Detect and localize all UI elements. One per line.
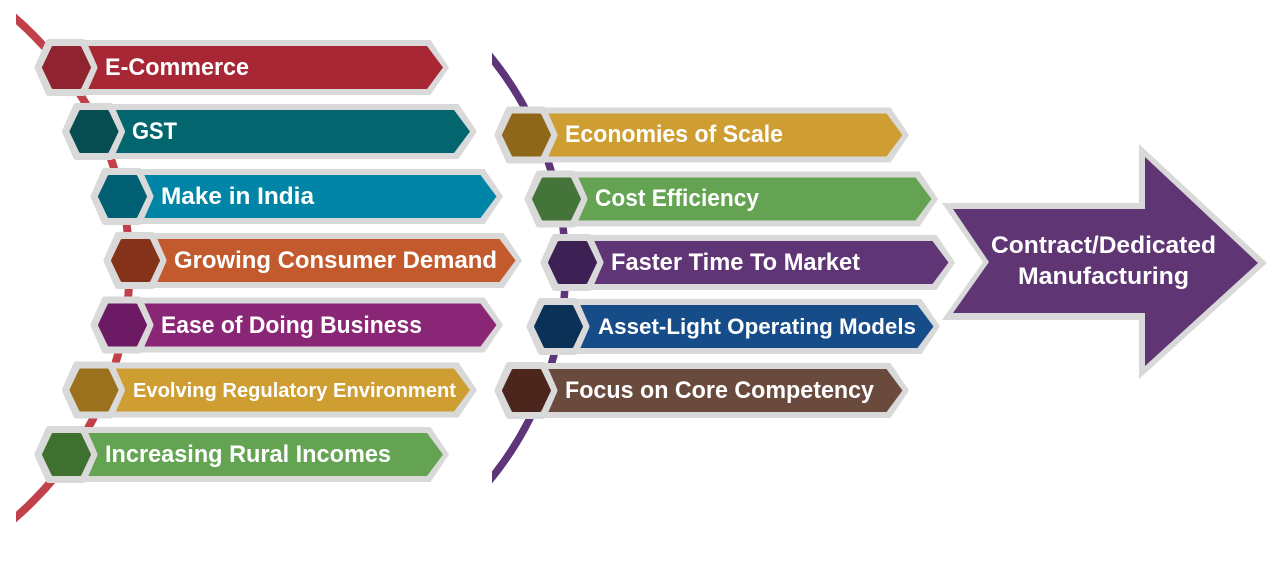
icon: hexagon: [38, 42, 94, 92]
arrow label line 1: Contract/Dedicated: [991, 232, 1216, 259]
label: Focus on Core Competency: [565, 377, 875, 404]
driver: Faster Time To Market: [544, 235, 955, 290]
arrow: Contract/Dedicated Manufacturing: [942, 144, 1267, 379]
icon: hexagon: [107, 236, 163, 286]
icon: hexagon: [528, 174, 584, 224]
label: Ease of Doing Business: [161, 312, 422, 339]
driver: Evolving Regulatory Environment: [66, 362, 477, 418]
icon: hexagon: [498, 110, 554, 160]
label: Increasing Rural Incomes: [105, 441, 391, 468]
bar: [526, 363, 909, 418]
label: Economies of Scale: [565, 121, 783, 148]
icon: hexagon: [94, 300, 150, 350]
driver: Make in India: [94, 169, 503, 224]
arrow label line 2: Manufacturing: [1018, 263, 1189, 290]
bar: [94, 104, 477, 159]
label: GST: [132, 118, 177, 145]
driver: Focus on Core Competency: [498, 363, 909, 418]
driver: GST: [66, 104, 477, 159]
driver: Increasing Rural Incomes: [38, 427, 449, 482]
driver: Ease of Doing Business: [94, 298, 503, 352]
icon: hexagon: [66, 106, 122, 156]
arrow border: [942, 144, 1267, 379]
driver: E-Commerce: [38, 40, 449, 95]
driver: Economies of Scale: [498, 108, 909, 162]
label: Cost Efficiency: [595, 185, 760, 212]
purple curve: [492, 52, 568, 484]
bar: [136, 233, 522, 288]
icon: hexagon: [498, 366, 554, 416]
icon: hexagon: [530, 302, 586, 352]
bar: [572, 235, 955, 290]
label: E-Commerce: [105, 54, 249, 81]
bar: [556, 172, 938, 226]
label: Evolving Regulatory Environment: [133, 380, 456, 402]
bar: [122, 298, 503, 352]
icon: hexagon: [66, 365, 122, 415]
bar: [66, 427, 449, 482]
panel: market drivers: [38, 40, 522, 482]
label: Growing Consumer Demand: [174, 247, 497, 274]
bar: [122, 169, 503, 224]
icon: hexagon: [38, 430, 94, 480]
icon: hexagon: [544, 238, 600, 288]
driver: Growing Consumer Demand: [107, 233, 522, 288]
driver: Asset-Light Operating Models: [530, 299, 940, 354]
driver: Cost Efficiency: [528, 172, 938, 226]
panel: company drivers: [498, 108, 955, 418]
icon: hexagon: [94, 172, 150, 222]
arrow fill: [953, 157, 1258, 366]
red curve: [16, 14, 133, 522]
bar: [66, 40, 449, 95]
bar: [558, 299, 940, 354]
label: Faster Time To Market: [611, 249, 860, 276]
bar: [94, 362, 477, 418]
label: Make in India: [161, 183, 315, 210]
label: Asset-Light Operating Models: [598, 314, 916, 339]
bar: [526, 108, 909, 162]
